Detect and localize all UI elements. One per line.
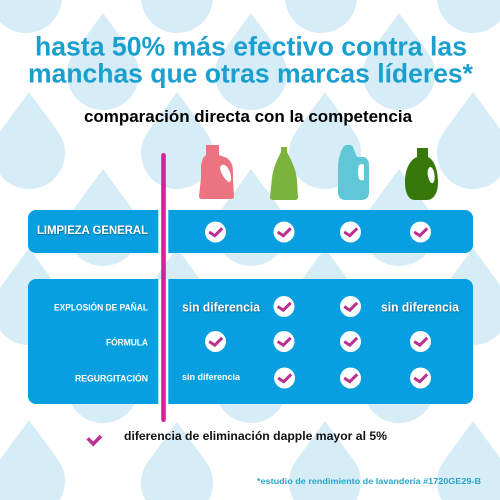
row values: explosión de pañal — [182, 296, 460, 317]
icon: light blue bottle — [338, 145, 369, 200]
panel: detailed comparison — [28, 279, 473, 404]
icon: light green bottle — [270, 147, 298, 200]
icon: dotted heart sparkle — [228, 0, 270, 20]
row label: regurgitación: REGURGITACIÓN — [75, 372, 148, 383]
row values: explosión de pañal: sin diferencia — [182, 300, 261, 314]
row label: fórmula: FÓRMULA — [106, 337, 148, 348]
icon: legend check — [88, 436, 101, 444]
panel: limpieza general — [28, 210, 473, 253]
title — [28, 32, 473, 88]
row values: regurgitación: sin diferencia — [182, 372, 241, 383]
subtitle: comparación directa con la competencia — [84, 107, 413, 126]
title: manchas que otras marcas líderes* — [28, 58, 473, 88]
row values: regurgitación — [182, 368, 431, 388]
footnote: *estudio de rendimiento de lavandería #1720GE29-B — [257, 476, 481, 486]
checks: row limpieza general — [205, 222, 431, 242]
column divider: magenta bar — [158, 153, 168, 422]
title: hasta 50% más efectivo contra las — [35, 32, 467, 62]
row values: explosión de pañal: sin diferencia — [381, 300, 460, 314]
row values: fórmula — [205, 331, 431, 352]
row label: explosión de pañal: EXPLOSIÓN DE PAÑAL — [54, 301, 148, 312]
icon: pink bottle — [199, 145, 234, 199]
row label: limpieza general: LIMPIEZA GENERAL — [37, 225, 148, 237]
icon: dark green bottle — [405, 148, 438, 200]
legend text: diferencia de eliminación dapple mayor al 5% — [124, 431, 387, 443]
